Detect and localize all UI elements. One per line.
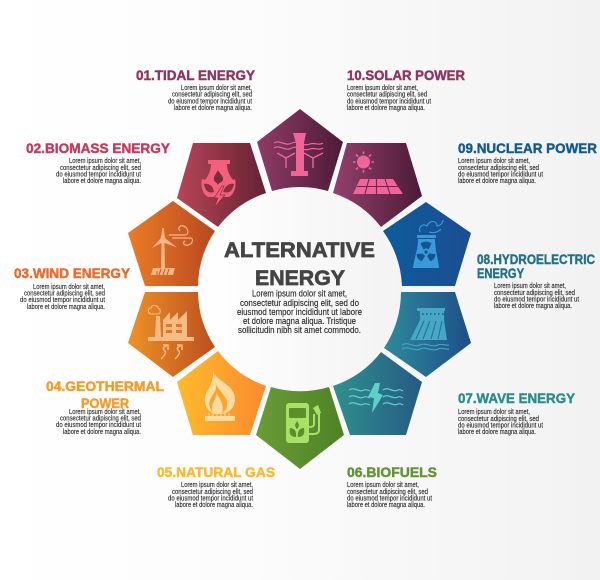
segment: tidal energy bbox=[257, 109, 343, 191]
label: 03 wind energy bbox=[14, 265, 131, 311]
icon: wave and lightning bbox=[349, 383, 403, 413]
label: 04 geothermal power: consectetur adipiscing elit, sed bbox=[60, 416, 141, 422]
label: 10 solar power bbox=[347, 67, 465, 112]
label: 01 tidal energy: Lorem ipsum dolor sit amet, bbox=[181, 85, 252, 92]
label: 05 natural gas bbox=[157, 464, 275, 509]
label: 02 biomass energy: Lorem ipsum dolor sit amet, bbox=[69, 158, 141, 165]
label: 01 tidal energy: labore et dolore magna aliqua. bbox=[174, 105, 252, 112]
label: 02 biomass energy: consectetur adipiscing elit, sed bbox=[60, 165, 141, 172]
segment: biofuels bbox=[256, 387, 344, 469]
segment: geothermal power bbox=[128, 292, 215, 377]
center text: eiusmod tempor incididunt ut labore bbox=[237, 306, 362, 317]
label: 05 natural gas: labore et dolore magna aliqua. bbox=[175, 502, 253, 509]
label: 07 wave energy: do eiusmod tempor incididunt ut bbox=[458, 422, 543, 430]
icon: biomass plant bbox=[201, 160, 236, 208]
center text: Lorem ipsum dolor sit amet, bbox=[252, 288, 347, 298]
label: 02 biomass energy bbox=[26, 140, 171, 185]
label: 09 nuclear power: Lorem ipsum dolor sit amet, bbox=[458, 158, 530, 165]
label: 09 nuclear power: consectetur adipiscing elit, sed bbox=[458, 165, 539, 172]
label: 09 nuclear power bbox=[458, 140, 597, 185]
label: 10 solar power: labore et dolore magna aliqua. bbox=[347, 105, 425, 112]
label: 06 biofuels: labore et dolore magna aliqua. bbox=[347, 502, 425, 509]
label: 09 nuclear power: 09.NUCLEAR POWER bbox=[458, 140, 597, 156]
label: 07 wave energy: labore et dolore magna aliqua. bbox=[458, 429, 536, 436]
label: 08 hydroelectric energy: do eiusmod tempor incididunt ut bbox=[494, 296, 579, 304]
label: 01 tidal energy: consectetur adipiscing elit, sed bbox=[172, 92, 252, 99]
center title bbox=[224, 238, 375, 290]
label: 03 wind energy: Lorem ipsum dolor sit amet, bbox=[33, 284, 105, 291]
icon: tidal turbine bbox=[274, 133, 323, 176]
label: 08 hydroelectric energy: consectetur adipiscing elit, sed bbox=[494, 290, 575, 297]
segment: solar power bbox=[333, 143, 422, 227]
label: 08 hydroelectric energy bbox=[477, 251, 595, 310]
label: 06 biofuels bbox=[347, 464, 437, 509]
segment: wave energy bbox=[333, 352, 422, 435]
segment: natural gas bbox=[177, 351, 266, 435]
label: 04 geothermal power: labore et dolore magna aliqua. bbox=[63, 429, 141, 436]
segment: hydroelectric energy bbox=[384, 292, 471, 377]
center text: sollicitudin nibh sit amet commodo. bbox=[238, 324, 361, 335]
label: 02 biomass energy: labore et dolore magna aliqua. bbox=[63, 178, 141, 185]
segment: biomass energy bbox=[177, 143, 266, 227]
label: 07 wave energy bbox=[458, 390, 576, 436]
center text bbox=[237, 288, 362, 335]
label: 07 wave energy: Lorem ipsum dolor sit amet, bbox=[458, 409, 530, 416]
label: 05 natural gas: do eiusmod tempor incididunt ut bbox=[168, 496, 253, 502]
center title: ALTERNATIVE bbox=[224, 238, 375, 262]
label: 06 biofuels: Lorem ipsum dolor sit amet, bbox=[347, 482, 419, 489]
label: 10 solar power: do eiusmod tempor incididunt ut bbox=[347, 98, 431, 105]
label: 01 tidal energy bbox=[136, 67, 256, 112]
label: 10 solar power: consectetur adipiscing elit, sed bbox=[347, 92, 427, 99]
icon: nuclear tower bbox=[413, 220, 443, 268]
icon: dam bbox=[402, 308, 449, 350]
label: 09 nuclear power: do eiusmod tempor incididunt ut bbox=[458, 172, 543, 178]
label: 05 natural gas: consectetur adipiscing elit, sed bbox=[172, 489, 253, 496]
label: 04 geothermal power: Lorem ipsum dolor sit amet, bbox=[69, 409, 141, 416]
label: 10 solar power: 10.SOLAR POWER bbox=[347, 67, 465, 83]
center title: ENERGY bbox=[255, 266, 345, 290]
label: 08 hydroelectric energy: labore et dolore magna aliqua. bbox=[494, 303, 572, 310]
label: 04 geothermal power: POWER bbox=[81, 395, 129, 411]
label: 03 wind energy: labore et dolore magna aliqua. bbox=[27, 304, 105, 311]
label: 03 wind energy: consectetur adipiscing elit, sed bbox=[24, 290, 105, 298]
label: 09 nuclear power: labore et dolore magna aliqua. bbox=[458, 178, 536, 185]
icon: biofuel pump bbox=[286, 403, 321, 443]
label: 08 hydroelectric energy: ENERGY bbox=[477, 265, 525, 281]
label: 05 natural gas: Lorem ipsum dolor sit amet, bbox=[181, 482, 253, 489]
center text: et dolore magna aliqua. Tristique bbox=[243, 315, 356, 326]
label: 03 wind energy: 03.WIND ENERGY bbox=[14, 265, 131, 281]
icon: geothermal factory bbox=[148, 305, 194, 359]
label: 04 geothermal power: do eiusmod tempor incididunt ut bbox=[56, 422, 141, 429]
label: 04 geothermal power bbox=[46, 378, 164, 436]
icon: wind turbine bbox=[151, 226, 192, 275]
icon: sun and solar panel bbox=[353, 152, 403, 194]
label: 03 wind energy: do eiusmod tempor incididunt ut bbox=[20, 297, 105, 304]
label: 08 hydroelectric energy: Lorem ipsum dolor sit amet, bbox=[494, 283, 566, 290]
label: 07 wave energy: consectetur adipiscing elit, sed bbox=[458, 416, 539, 423]
label: 10 solar power: Lorem ipsum dolor sit amet, bbox=[347, 85, 418, 92]
label: 06 biofuels: consectetur adipiscing elit, sed bbox=[347, 489, 428, 496]
label: 07 wave energy: 07.WAVE ENERGY bbox=[458, 390, 576, 406]
label: 02 biomass energy: do eiusmod tempor incididunt ut bbox=[56, 172, 141, 178]
segment: wind energy bbox=[128, 201, 215, 286]
center text: consectetur adipiscing elit, sed do bbox=[240, 297, 359, 308]
label: 01 tidal energy: do eiusmod tempor incididunt ut bbox=[168, 98, 252, 105]
central circle bbox=[198, 187, 402, 391]
label: 06 biofuels: do eiusmod tempor incididunt ut bbox=[347, 496, 432, 502]
label: 05 natural gas: 05.NATURAL GAS bbox=[157, 464, 275, 480]
label: 02 biomass energy: 02.BIOMASS ENERGY bbox=[26, 140, 171, 156]
label: 01 tidal energy: 01.TIDAL ENERGY bbox=[136, 67, 256, 83]
segment: nuclear power bbox=[383, 202, 471, 286]
label: 04 geothermal power: 04.GEOTHERMAL bbox=[46, 378, 164, 394]
label: 06 biofuels: 06.BIOFUELS bbox=[347, 464, 437, 480]
icon: gas flame bbox=[205, 371, 235, 421]
